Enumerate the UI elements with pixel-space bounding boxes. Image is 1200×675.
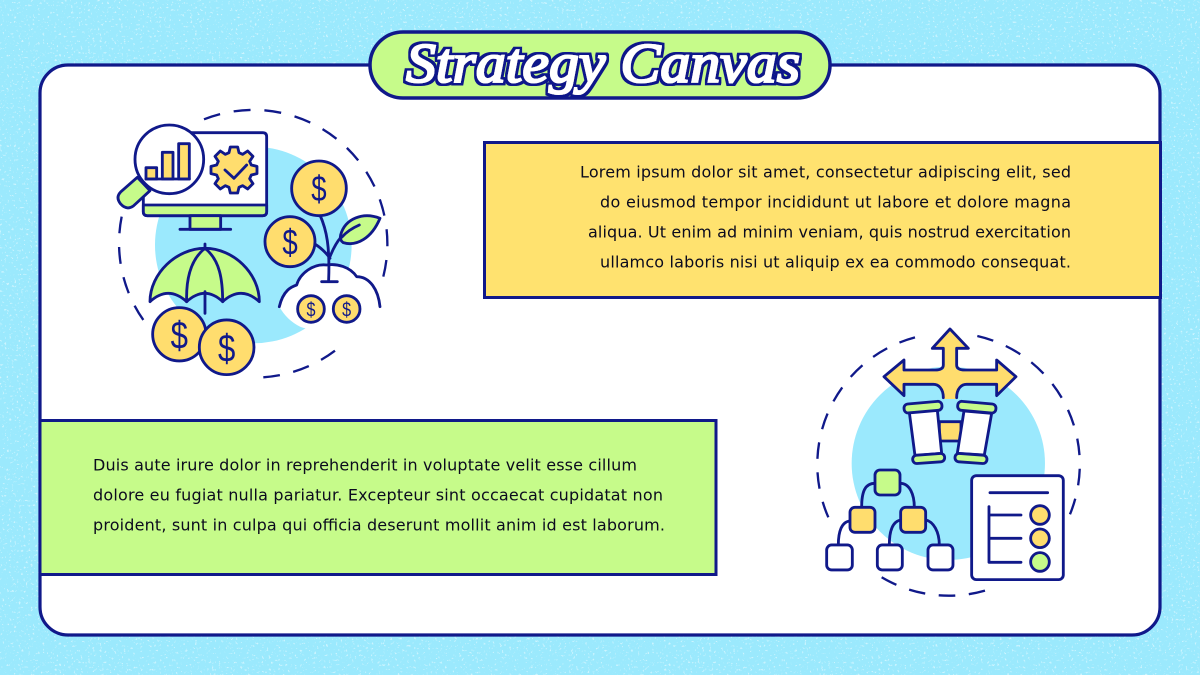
icon: umbrella <box>150 244 259 313</box>
icon: binoculars <box>904 401 996 464</box>
icon: money plant: $ <box>282 221 298 262</box>
text block: green box paragraph: Duis aute irure dolor in reprehenderit in voluptate velit esse cillum <box>93 456 637 474</box>
title pill <box>370 32 830 98</box>
icon: monitor with gear <box>143 133 267 229</box>
icon: stacked coins <box>153 308 254 375</box>
icon: money plant: $ <box>342 298 352 321</box>
main white panel <box>40 65 1160 635</box>
icon: magnifier with bar chart <box>118 125 204 208</box>
text block: yellow box paragraph: ullamco laboris nisi ut aliquip ex ea commodo consequat. <box>600 252 1071 272</box>
icon: three-way arrow <box>884 329 1016 399</box>
text block: green box paragraph: proident, sunt in culpa qui officia deserunt mollit anim id est laborum. <box>93 516 665 534</box>
text block: yellow box paragraph: aliqua. Ut enim ad minim veniam, quis nostrud exercitation <box>588 222 1071 242</box>
icon: stacked coins: $ <box>171 313 188 357</box>
text block: green box paragraph: dolore eu fugiat nulla pariatur. Excepteur sint occaecat cupidatat non <box>93 486 663 504</box>
icon group: finance and growth <box>118 110 387 377</box>
icon: stacked coins: $ <box>218 326 235 370</box>
panel: green text box <box>40 420 716 574</box>
icon group: direction and decision <box>817 329 1080 596</box>
icon: money plant <box>265 161 380 330</box>
panel: yellow text box <box>484 142 1160 298</box>
title: Strategy Canvas <box>406 33 800 95</box>
text block: yellow box paragraph: do eiusmod tempor incididunt ut labore et dolore magna <box>600 192 1071 212</box>
icon: money plant: $ <box>306 298 316 321</box>
icon: decision tree <box>827 470 953 570</box>
icon: checklist document <box>972 476 1063 580</box>
text block: yellow box paragraph: Lorem ipsum dolor sit amet, consectetur adipiscing elit, sed <box>580 162 1071 182</box>
icon: money plant: $ <box>311 168 327 209</box>
